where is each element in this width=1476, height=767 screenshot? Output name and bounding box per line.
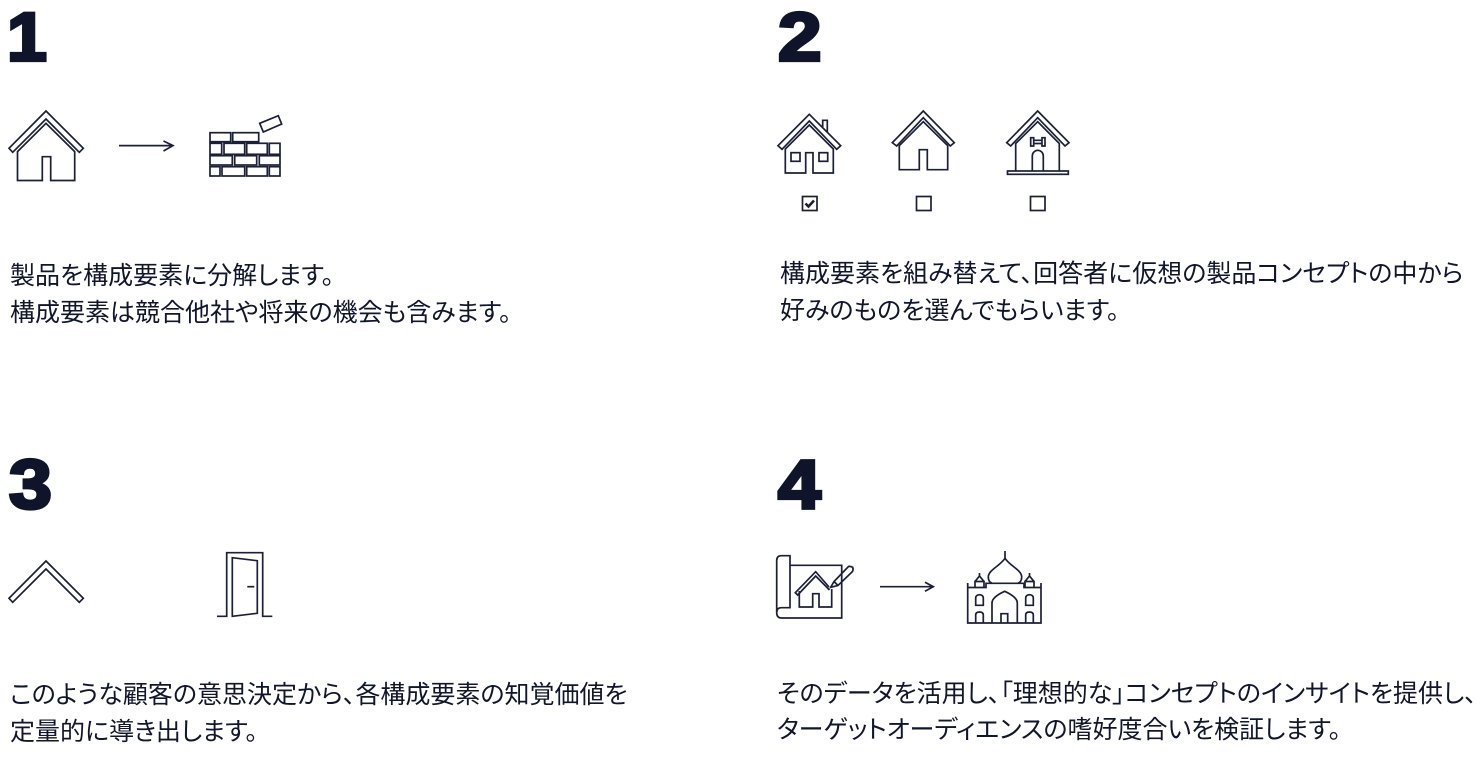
panel: step 4	[777, 447, 1476, 744]
text block 1: 構成要素は競合他社や将来の機会も含みます。	[10, 299, 511, 327]
text block 1	[10, 262, 511, 327]
checkbox empty	[1030, 196, 1045, 210]
text block 1: 製品を構成要素に分解します。	[10, 262, 334, 290]
icon: blueprint	[777, 556, 853, 618]
icon: house with chimney and windows	[778, 114, 841, 173]
number 2: 2	[778, 0, 822, 75]
text block 2: 好みのものを選んでもらいます。	[780, 297, 1119, 325]
icon: simple house	[892, 111, 954, 170]
icon: door	[217, 553, 272, 616]
arrow	[119, 141, 173, 151]
icon: roof	[9, 561, 83, 602]
number 3: 3	[9, 445, 52, 523]
text block 3: 定量的に導き出します。	[10, 718, 258, 746]
checkbox empty	[916, 196, 931, 210]
text block 3	[10, 681, 628, 746]
panel: step 2	[778, 0, 1463, 325]
number 4: 4	[778, 447, 821, 523]
checkbox checked	[802, 196, 817, 210]
text block 2	[780, 260, 1463, 325]
text block 2: 構成要素を組み替えて、回答者に仮想の製品コンセプトの中から	[780, 260, 1463, 288]
text block 4: ターゲットオーディエンスの嗜好度合いを検証します。	[777, 716, 1341, 744]
text block 4: そのデータを活用し、「理想的な」コンセプトのインサイトを提供し、	[777, 680, 1476, 708]
text block 3: このような顧客の意思決定から、各構成要素の知覚価値を	[10, 681, 628, 709]
panel: step 1	[7, 0, 511, 327]
icon: house	[9, 111, 83, 180]
panel: step 3	[9, 445, 628, 746]
text block 4	[777, 680, 1476, 744]
number 1: 1	[7, 0, 47, 75]
arrow	[880, 582, 933, 591]
icon: taj mahal	[968, 551, 1041, 623]
icon: dog house	[1007, 111, 1069, 174]
icon: brick wall	[210, 116, 282, 176]
